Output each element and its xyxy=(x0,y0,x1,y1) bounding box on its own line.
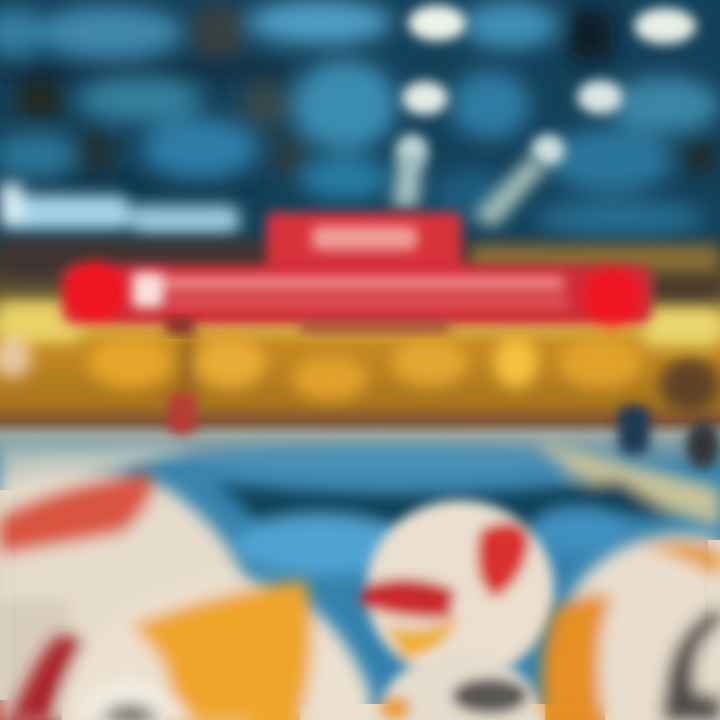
ceiling: blue panels and lights xyxy=(0,0,720,236)
bingo ball: left red striped xyxy=(0,467,250,720)
ball edge underlay xyxy=(0,490,720,720)
bingo ball: right numbered xyxy=(542,533,720,720)
bright white band at left xyxy=(0,183,240,235)
banner drips xyxy=(165,318,450,334)
floor and pool xyxy=(0,440,720,575)
bingo ball: bottom middle xyxy=(375,650,545,720)
dark band under ceiling xyxy=(0,240,720,300)
bingo ball: small red and white xyxy=(360,500,554,680)
figures near the floor xyxy=(168,392,720,469)
yellow stage band xyxy=(0,302,720,413)
light beams xyxy=(392,155,548,228)
bingo ball: centre orange xyxy=(10,578,372,720)
ceiling lights xyxy=(396,5,696,166)
banner lettering glow xyxy=(132,226,570,308)
red banner sign xyxy=(62,212,652,334)
